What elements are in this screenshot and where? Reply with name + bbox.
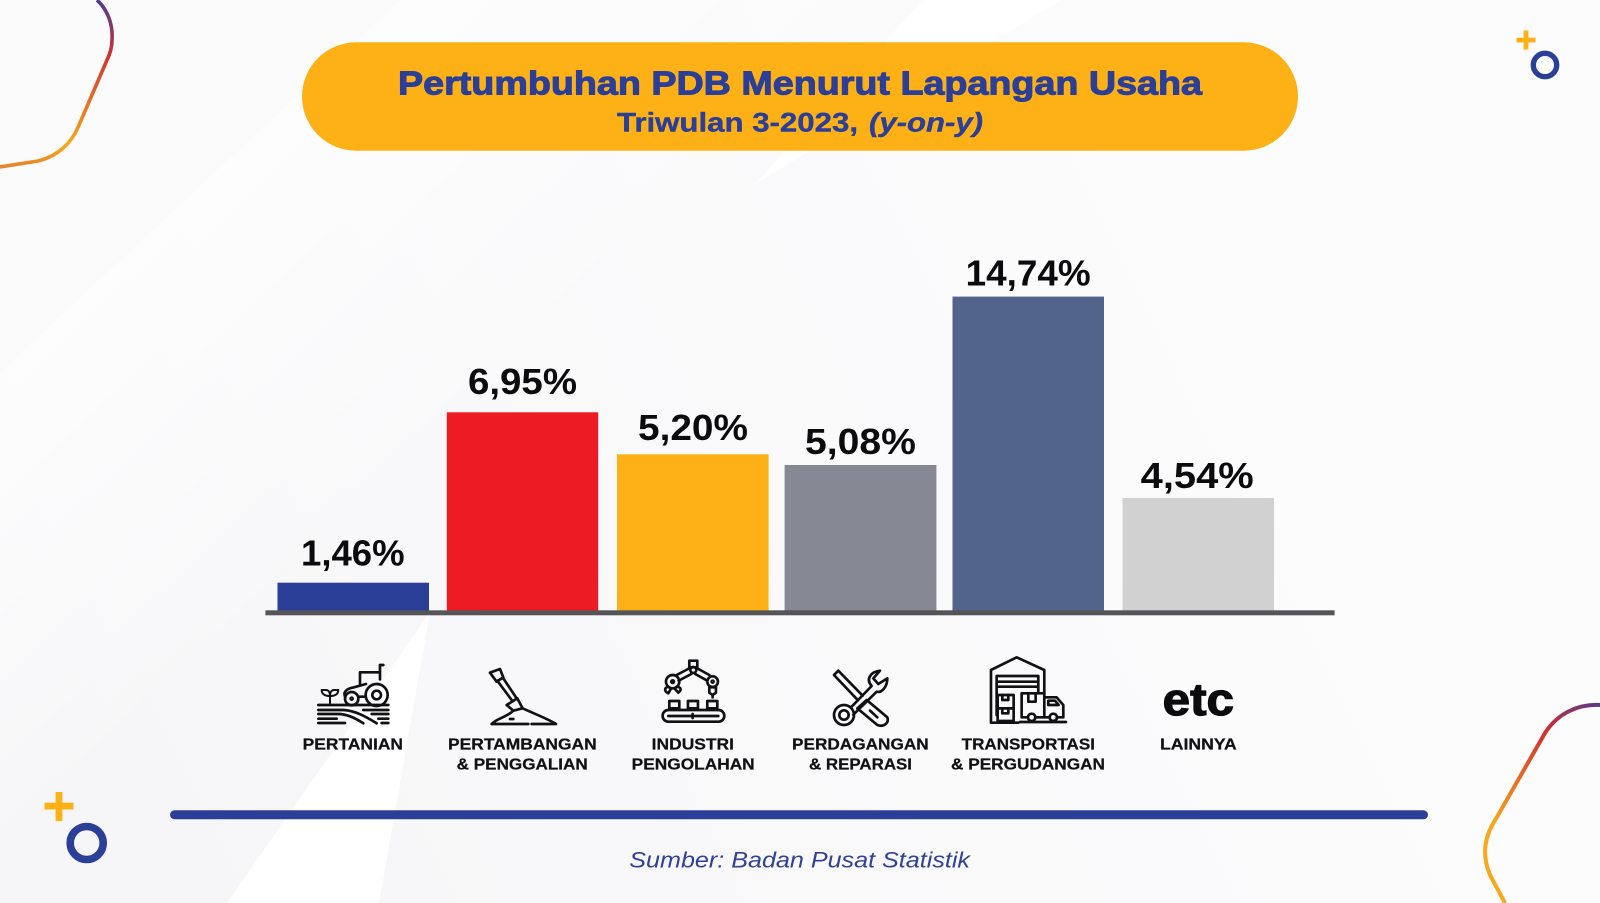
- bar: industri 5,20%: 5,20%: [638, 407, 748, 448]
- bar chart: [265, 253, 1335, 615]
- bar: pertambangan 6,95%: 6,95%: [468, 361, 577, 402]
- bar: lainnya 4,54%: [1122, 455, 1274, 611]
- bar: pertanian 1,46%: 1,46%: [301, 532, 405, 574]
- title: Pertumbuhan PDB Menurut Lapangan Usaha: [398, 64, 1203, 102]
- icon: robot arm and conveyor: [663, 661, 724, 722]
- bar: lainnya 4,54%: 4,54%: [1141, 455, 1254, 496]
- icon: etc: etc: [1163, 674, 1234, 725]
- bar: pertanian 1,46%: [278, 532, 429, 611]
- category: transportasi: & PERGUDANGAN: [951, 756, 1105, 773]
- category: perdagangan: & REPARASI: [809, 756, 912, 773]
- category: pertambangan: [448, 669, 597, 773]
- category: lainnya: LAINNYA: [1160, 736, 1237, 753]
- decorative curve: top left: [0, 0, 112, 167]
- bar: perdagangan 5,08%: 5,08%: [805, 421, 916, 462]
- subtitle: (y-on-y): [869, 108, 983, 138]
- category: pertambangan: PERTAMBANGAN: [448, 736, 597, 753]
- category: transportasi: [951, 657, 1105, 773]
- icon: wrench and screwdriver: [834, 671, 888, 726]
- category: industri: PENGOLAHAN: [632, 756, 755, 773]
- decorative curve: bottom right: [1485, 705, 1600, 903]
- category: lainnya: [1160, 674, 1237, 753]
- category: transportasi: TRANSPORTASI: [962, 736, 1095, 753]
- icon: shovel and mound: [490, 669, 556, 724]
- category: industri: INDUSTRI: [652, 736, 734, 753]
- bar: transportasi 14,74%: 14,74%: [966, 253, 1091, 294]
- category: perdagangan: PERDAGANGAN: [792, 736, 929, 753]
- category: pertanian: PERTANIAN: [303, 736, 403, 753]
- title banner: [302, 42, 1298, 151]
- axis line: [265, 610, 1335, 615]
- icon: warehouse and truck: [991, 657, 1066, 723]
- icon: tractor and field: [318, 665, 388, 723]
- bar: perdagangan 5,08%: [785, 421, 936, 611]
- subtitle: Triwulan 3-2023,: [617, 108, 858, 138]
- source note: Sumber: Badan Pusat Statistik: [629, 848, 972, 872]
- bar: industri 5,20%: [617, 407, 769, 611]
- decoration: bottom left plus and ring: [44, 792, 103, 860]
- bar: pertambangan 6,95%: [447, 361, 598, 611]
- category: perdagangan: [792, 671, 929, 773]
- footer rule: [170, 810, 1428, 819]
- category: industri: [632, 661, 755, 773]
- category: pertanian: [303, 665, 403, 753]
- subtitle: [617, 108, 983, 138]
- bar: transportasi 14,74%: [952, 253, 1104, 611]
- category: pertambangan: & PENGGALIAN: [457, 756, 588, 773]
- decoration: top right plus and ring: [1516, 30, 1557, 77]
